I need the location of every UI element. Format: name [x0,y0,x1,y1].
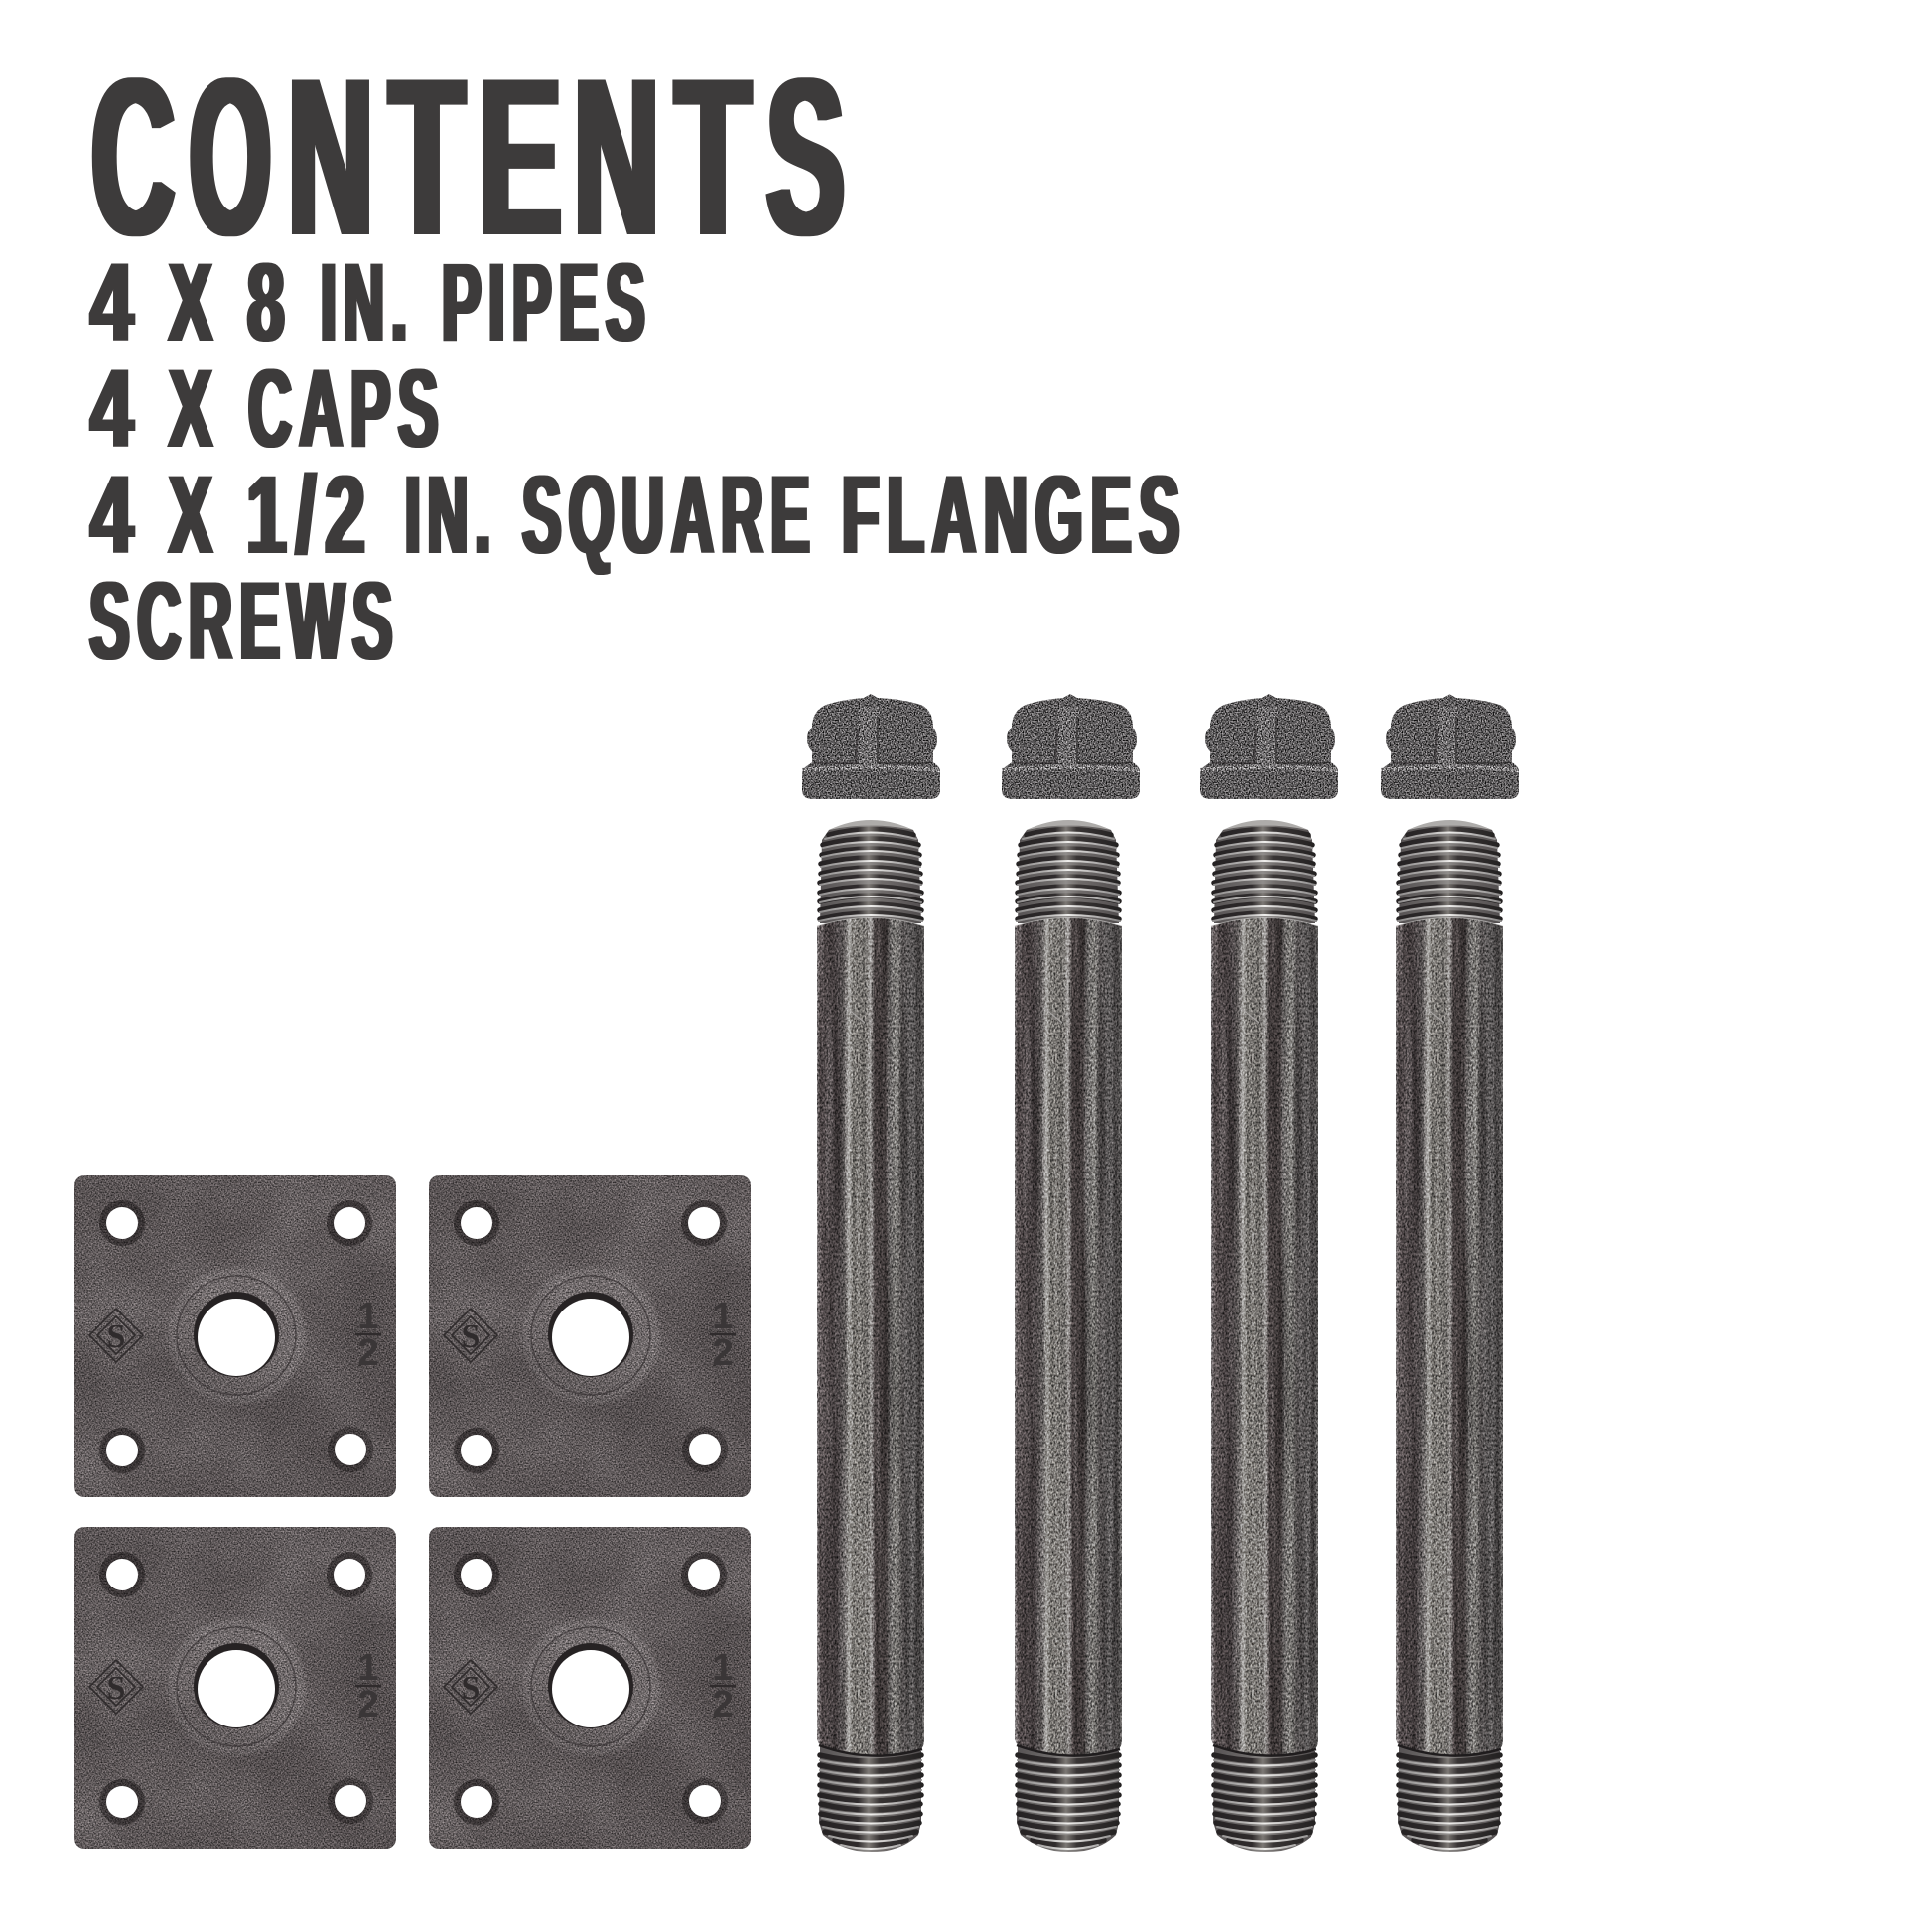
title: T [389,31,465,282]
list item: caps: 4 [90,346,143,471]
flange: bottom left: 2 [357,1684,379,1725]
list item: screws: SCREWS [89,559,400,683]
list item: flanges: IN. [405,453,497,577]
pipe 1 [817,820,924,1852]
title: E [479,31,562,282]
cap 1 [802,694,940,799]
list item: caps [90,346,446,471]
flange: top right: 1 [712,1296,734,1337]
flange: top left [74,1175,396,1497]
title: C [91,31,175,282]
list item: flanges: X [169,453,220,577]
title: S [766,31,845,282]
flange: bottom right [429,1527,751,1849]
list item: pipes: PIPES [442,240,652,364]
flange: top left: S [107,1318,125,1355]
flange: bottom right: S [462,1670,480,1707]
list item: pipes: 8 [247,240,293,364]
list item: flanges: FLANGES [842,453,1187,577]
list item: flanges: SQUARE [522,453,817,577]
list item: pipes: X [169,240,220,364]
flange: top left: 1 [357,1296,379,1337]
flange: top right: S [462,1318,480,1355]
title: N [288,31,373,282]
contents list [89,240,1187,683]
list item: flanges: 4 [90,453,143,577]
list item: pipes: 4 [90,240,143,364]
flange: bottom left: 1 [357,1647,379,1689]
list item: caps: CAPS [248,346,446,471]
pipe 3 [1211,820,1318,1852]
cap 3 [1200,694,1338,799]
pipe 4 [1396,820,1503,1852]
title [91,31,845,282]
pipe 2 [1015,820,1122,1852]
title: O [190,31,271,282]
flange: top right: 2 [712,1332,734,1374]
flange: bottom right: 1 [712,1647,734,1689]
list item: flanges: 1/2 [246,453,374,577]
title: T [675,31,751,282]
flange: bottom left [74,1527,396,1849]
list item: flanges [90,453,1187,577]
cap 2 [1002,694,1140,799]
list item: pipes [90,240,652,364]
list item: caps: X [169,346,220,471]
flange: top left: 2 [357,1332,379,1374]
cap 4 [1381,694,1519,799]
list item: pipes: IN. [321,240,414,364]
flange: top right [429,1175,751,1497]
flange: bottom left: S [107,1670,125,1707]
flange: bottom right: 2 [712,1684,734,1725]
title: N [574,31,659,282]
